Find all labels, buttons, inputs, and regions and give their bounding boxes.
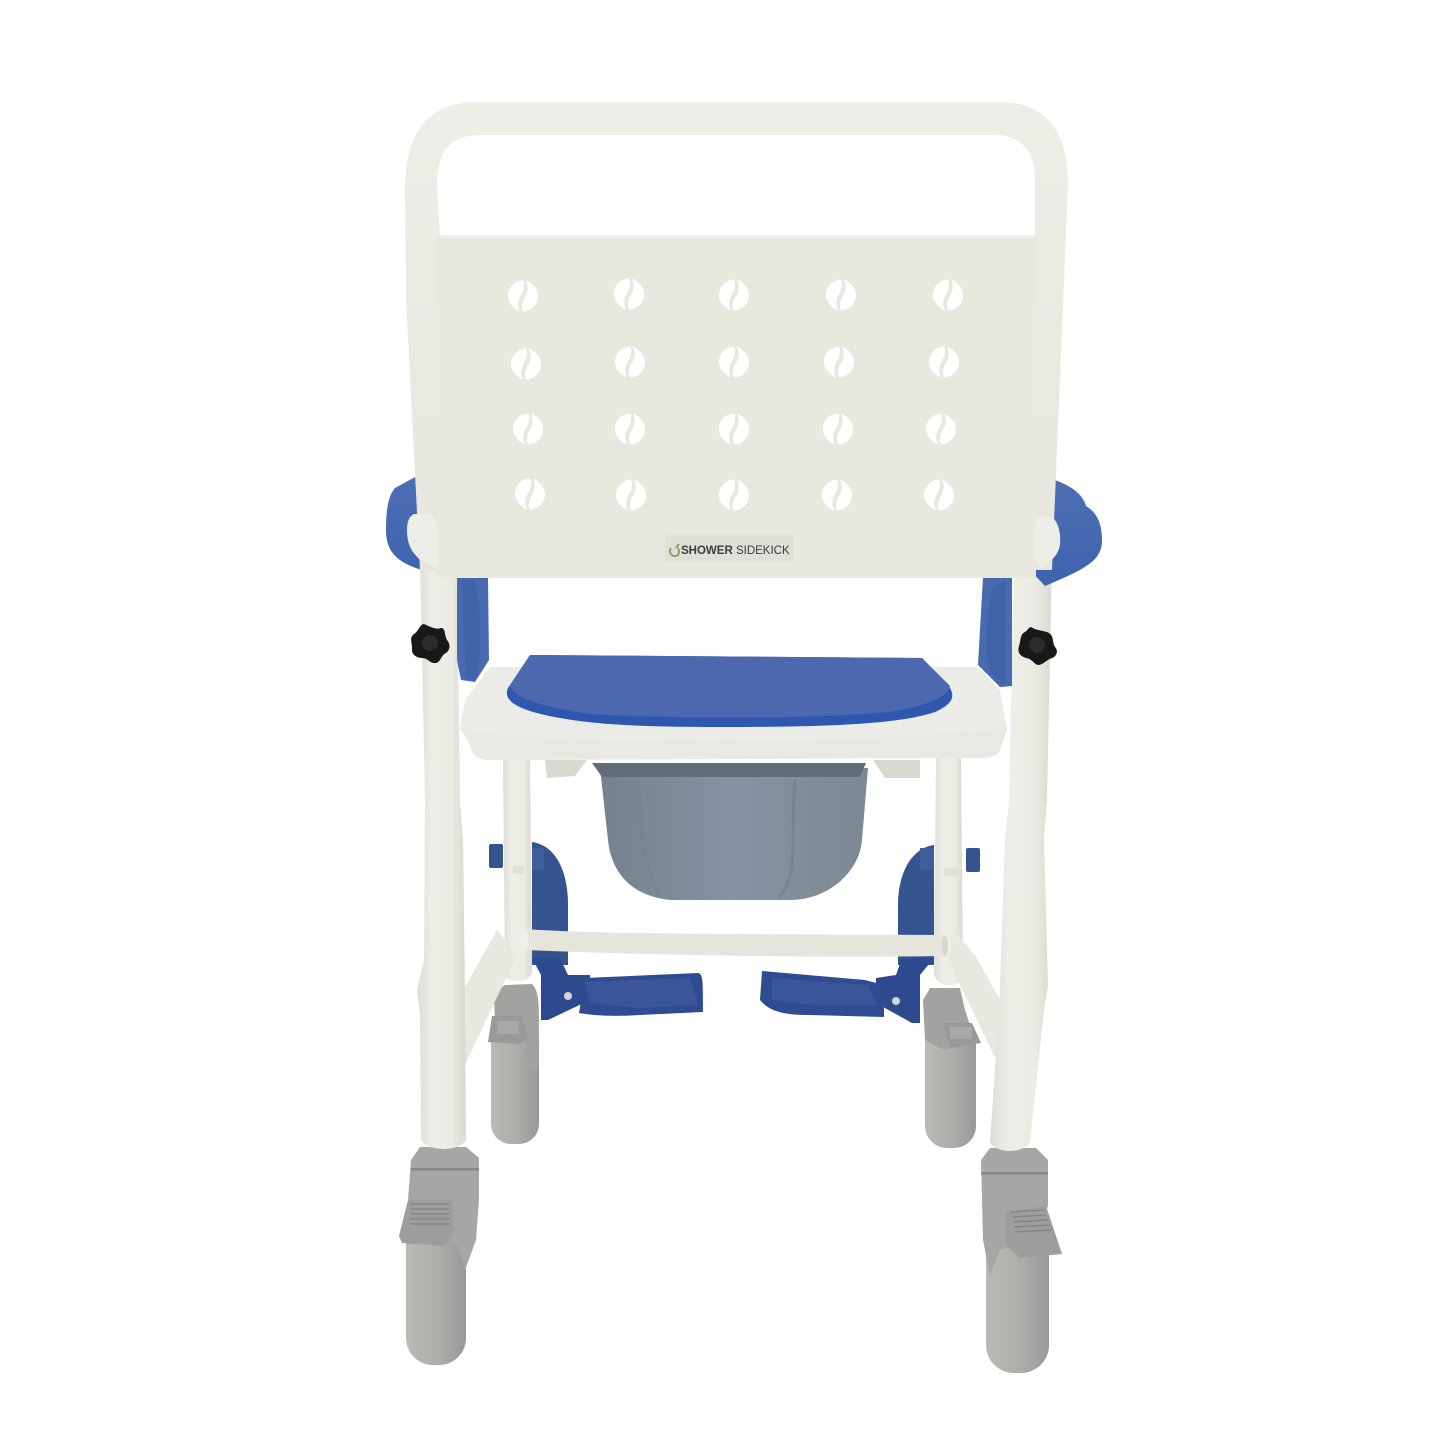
rear uprights bbox=[503, 758, 963, 986]
right armrest bbox=[1030, 478, 1102, 586]
perforated back panel bbox=[436, 235, 1036, 578]
left star knob bbox=[411, 624, 450, 663]
right star knob bbox=[1018, 627, 1057, 665]
right hinge knuckle bbox=[1034, 517, 1060, 568]
panel top edge bbox=[441, 235, 1035, 238]
diagonal braces bbox=[462, 930, 1000, 1068]
brand label bbox=[665, 535, 793, 562]
right footrest bbox=[760, 971, 900, 1017]
rear left caster bbox=[488, 984, 539, 1144]
commode bucket bbox=[592, 763, 868, 900]
brand name: SHOWER SIDEKICK bbox=[681, 545, 790, 557]
seat plate bbox=[460, 667, 1007, 760]
right lower arm pad bbox=[978, 577, 1012, 687]
crossbar bbox=[520, 929, 948, 957]
left armrest bbox=[386, 476, 430, 570]
seat brackets bbox=[545, 760, 920, 778]
handle frame bbox=[405, 102, 1068, 570]
rear right caster bbox=[923, 988, 981, 1148]
backrest frame and panel bbox=[405, 102, 1068, 578]
right leg rest disc bbox=[876, 845, 980, 1023]
left leg rest disc bbox=[489, 842, 590, 1020]
left lower arm pad bbox=[457, 577, 489, 682]
left hinge knuckle bbox=[407, 514, 438, 568]
blue seat pad bbox=[507, 655, 952, 727]
front left caster bbox=[399, 1147, 479, 1365]
front right caster bbox=[981, 1148, 1062, 1373]
front left leg bbox=[417, 560, 466, 1149]
front right leg bbox=[990, 560, 1052, 1151]
panel holes bbox=[508, 278, 963, 510]
icon: leaf bbox=[670, 544, 679, 556]
left footrest bbox=[564, 973, 703, 1016]
